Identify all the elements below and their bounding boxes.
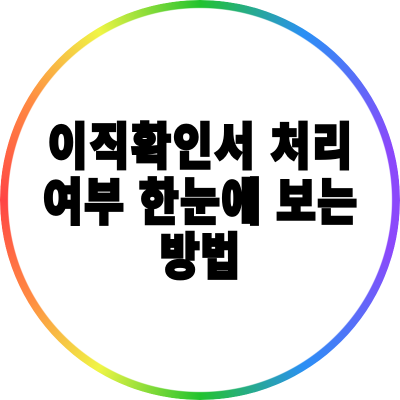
title line 1: 이직확인서 처리 <box>48 119 352 175</box>
title line 3: 방법 <box>160 229 240 285</box>
title line 2: 여부 한눈에 보는 <box>43 175 357 230</box>
